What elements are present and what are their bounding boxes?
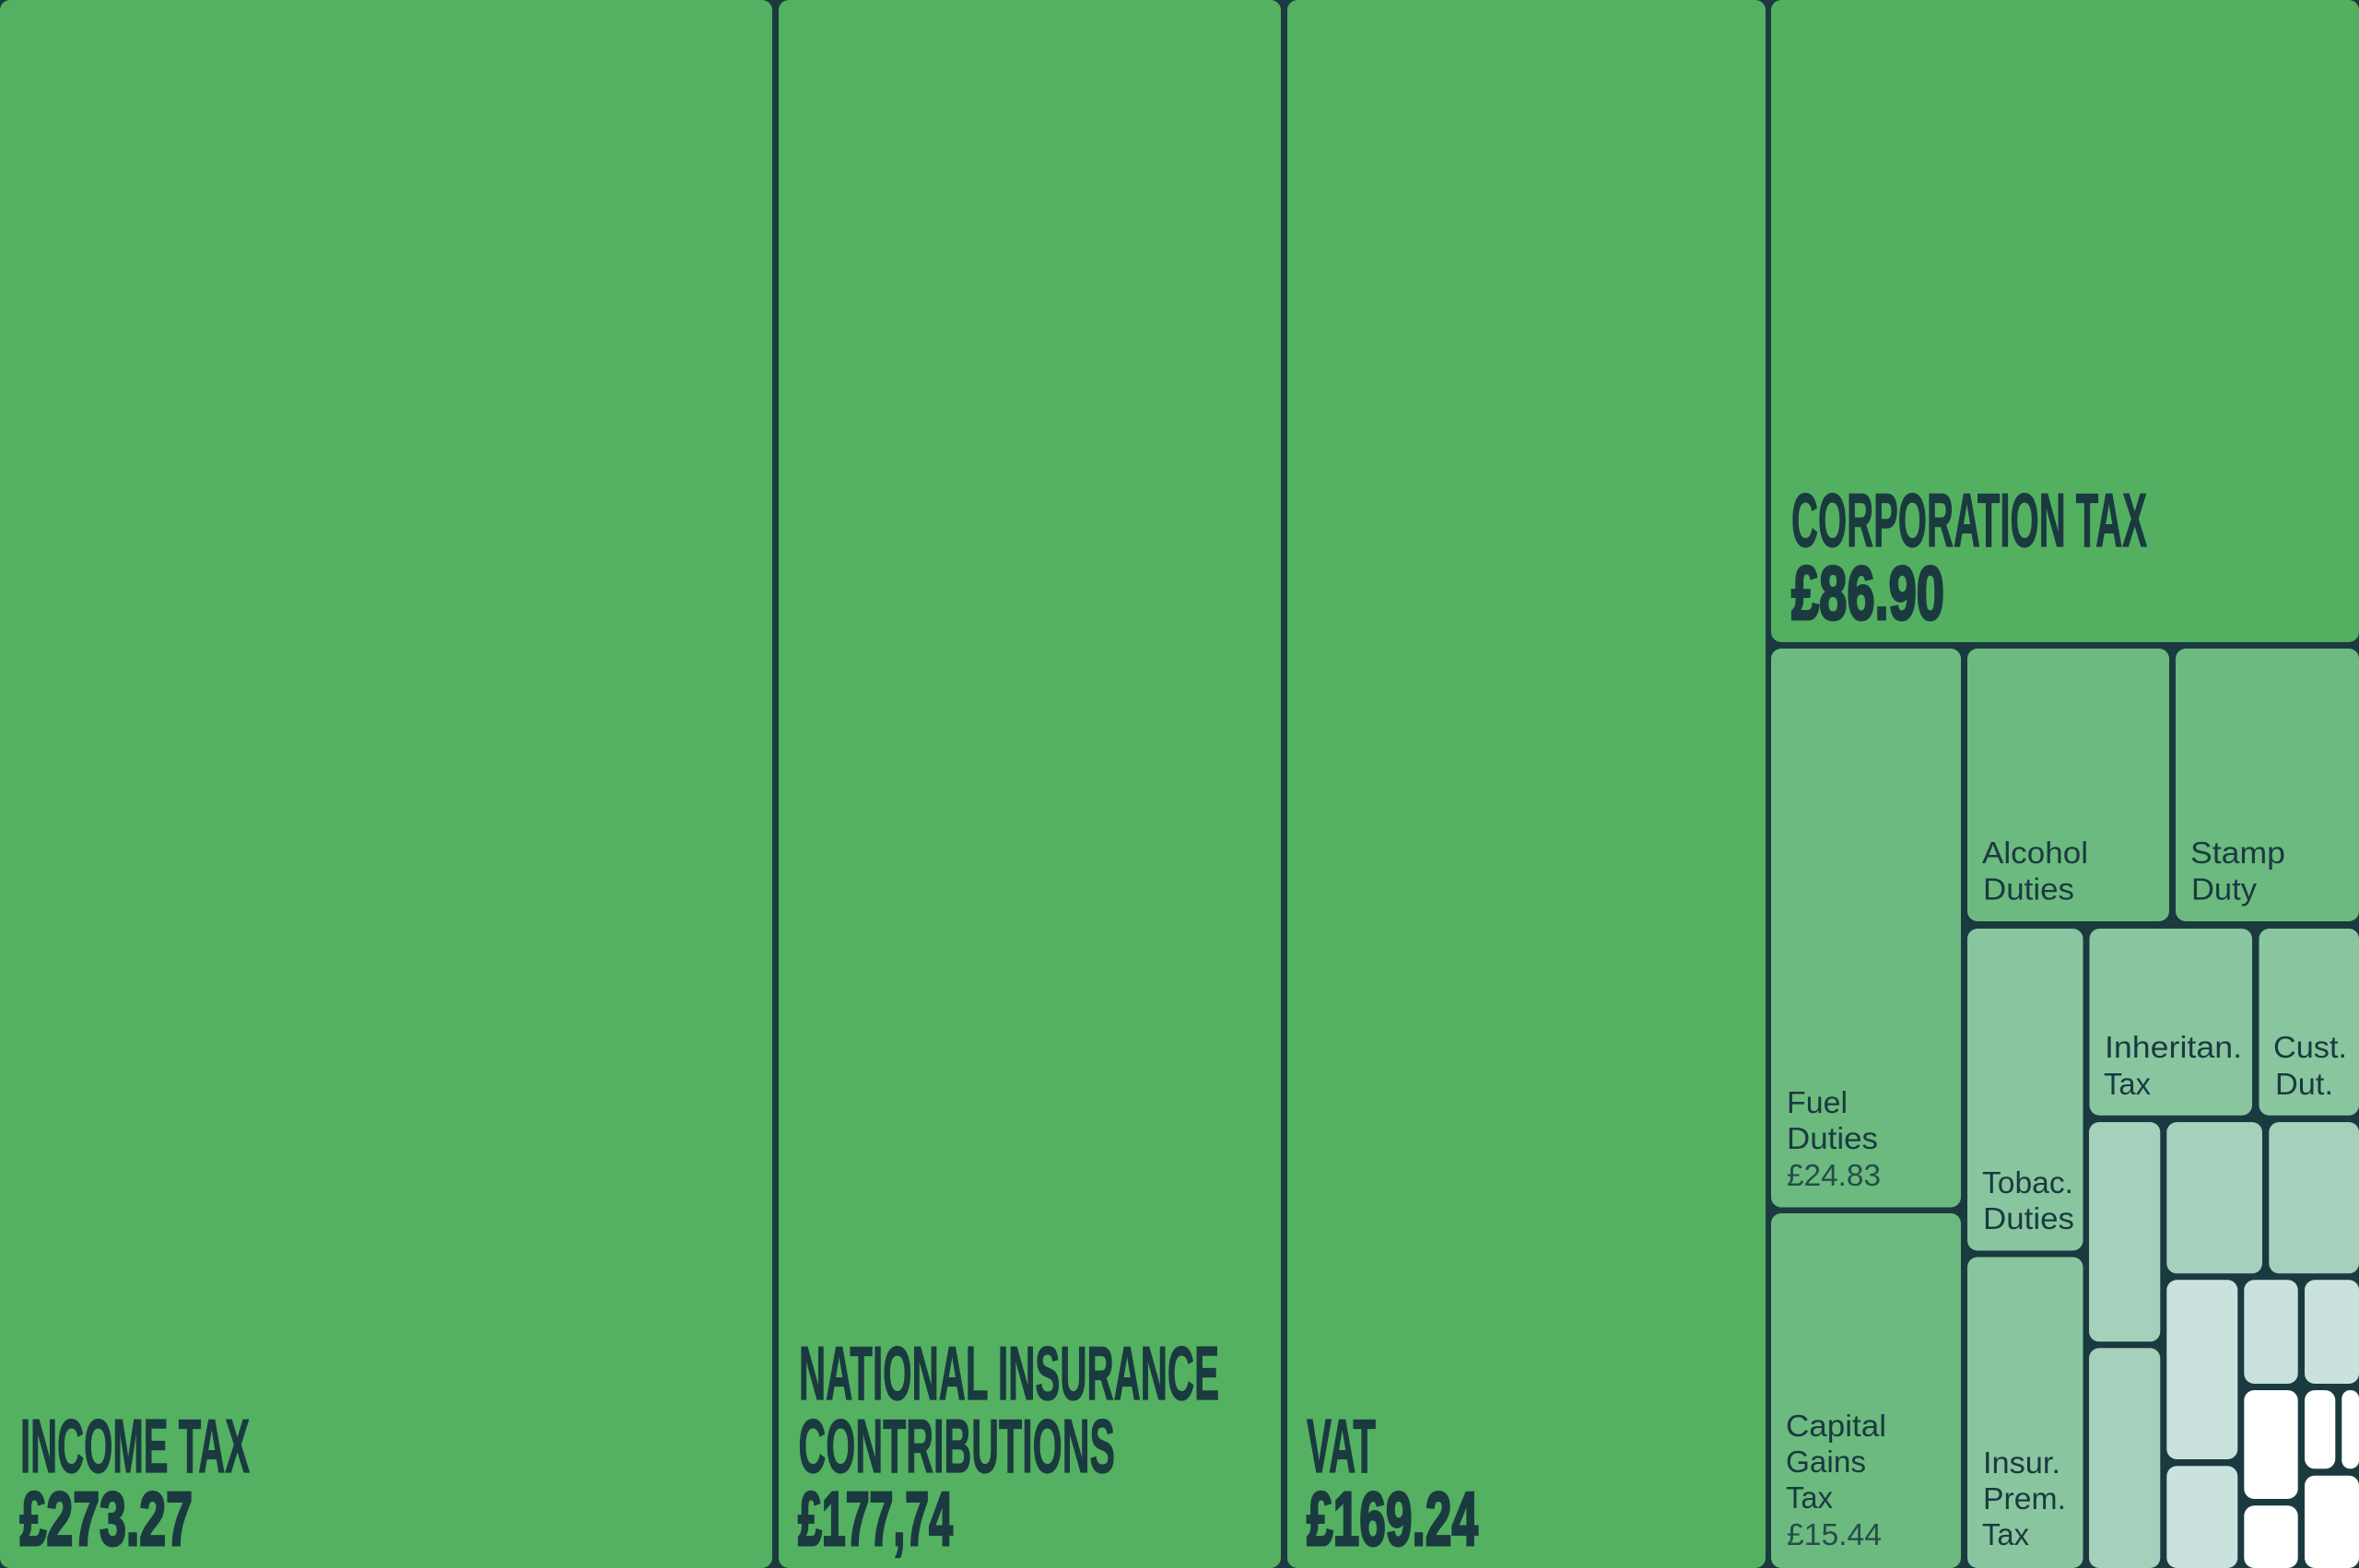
label: inheritance tax: Inheritan. [2105, 1030, 2242, 1064]
label: fuel duties: Fuel [1787, 1085, 1848, 1119]
value: corporation tax: £86.90 [1791, 550, 1944, 636]
label: fuel duties: Duties [1787, 1121, 1878, 1155]
value: capital gains tax: £15.44 [1787, 1517, 1882, 1551]
label: capital gains tax [1786, 1409, 1886, 1515]
label: insurance premium tax: Prem. [1983, 1481, 2066, 1515]
value: VAT: £169.24 [1307, 1476, 1478, 1562]
tile group: fifth-tier unlabelled taxes [2166, 1280, 2359, 1568]
label: alcohol duties: Alcohol [1982, 836, 2088, 870]
panel: income tax [0, 0, 772, 1568]
heading: national insurance contributions [798, 1330, 1219, 1489]
label: stamp duty: Duty [2191, 872, 2258, 907]
panel: capital gains tax [1771, 1213, 1961, 1568]
heading: national insurance contributions: CONTRIBUTIONS [798, 1403, 1115, 1489]
panel: national insurance contributions [779, 0, 1281, 1568]
label: inheritance tax [2104, 1030, 2242, 1101]
label: inheritance tax: Tax [2104, 1067, 2151, 1101]
label: customs duties: Cust. [2273, 1030, 2347, 1064]
label: capital gains tax: Capital [1786, 1409, 1886, 1443]
tile group: smallest unlabelled taxes [2244, 1390, 2359, 1568]
label: alcohol duties: Duties [1983, 872, 2074, 907]
panel: national insurance contributions: NATIONAL INSURANCE [799, 1330, 1219, 1416]
value: income tax: £273.27 [20, 1476, 193, 1562]
label: customs duties: Dut. [2275, 1067, 2333, 1101]
label: insurance premium tax: Tax [1982, 1517, 2029, 1551]
panel: insurance premium tax [1967, 1257, 2083, 1568]
label: insurance premium tax [1982, 1445, 2066, 1551]
label: tobacco duties [1982, 1165, 2074, 1235]
panel: tobacco duties [1967, 929, 2083, 1251]
label: tobacco duties: Tobac. [1982, 1165, 2073, 1199]
label: stamp duty [2190, 836, 2285, 907]
panel: income tax: INCOME TAX [20, 1403, 250, 1489]
label: fuel duties [1787, 1085, 1878, 1155]
panel: corporation tax [1771, 0, 2359, 642]
panel: inheritance tax [2090, 929, 2252, 1116]
label: customs duties [2273, 1030, 2347, 1101]
label: stamp duty: Stamp [2190, 836, 2285, 870]
panel: fuel duties [1771, 649, 1961, 1207]
panel: customs duties [2259, 929, 2359, 1116]
label: tobacco duties: Duties [1983, 1201, 2074, 1235]
label: insurance premium tax: Insur. [1983, 1445, 2060, 1480]
panel: VAT: VAT [1307, 1403, 1376, 1489]
tile group: fourth-tier unlabelled taxes [2089, 1122, 2359, 1568]
label: alcohol duties [1982, 836, 2088, 907]
value: national insurance contributions: £177,74 [798, 1476, 953, 1562]
label: capital gains tax: Gains [1786, 1445, 1866, 1479]
panel: VAT [1287, 0, 1766, 1568]
value: fuel duties: £24.83 [1787, 1158, 1881, 1192]
label: capital gains tax: Tax [1786, 1480, 1833, 1515]
panel: stamp duty [2176, 649, 2359, 921]
panel: alcohol duties [1967, 649, 2169, 921]
